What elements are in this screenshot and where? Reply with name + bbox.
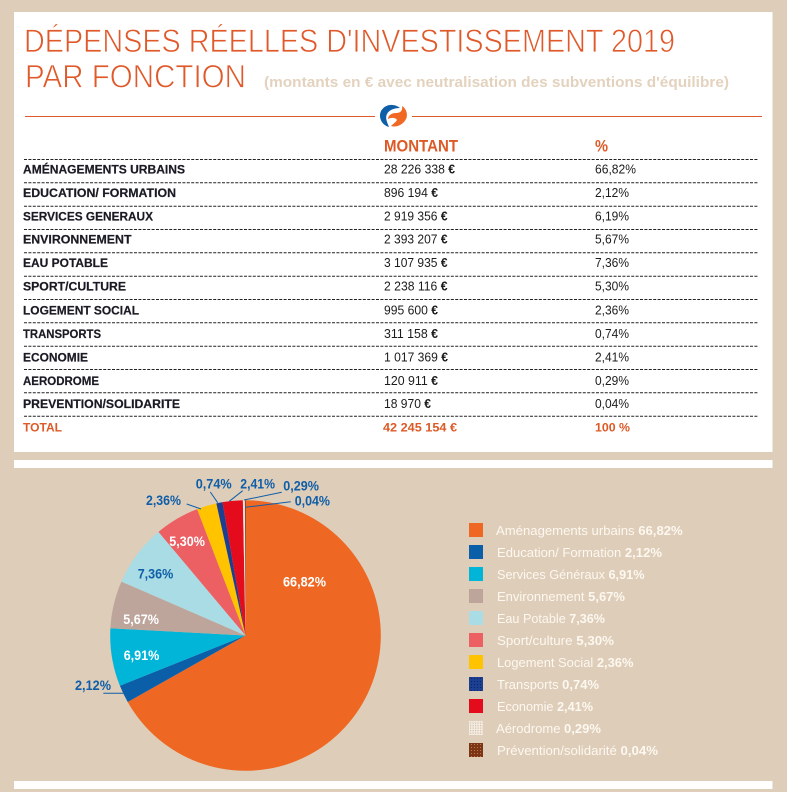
row: services generaux: SERVICES GENERAUX [23, 209, 153, 223]
legend item: education: Education/ Formation 2,12% [497, 545, 662, 560]
pie chart [75, 476, 381, 771]
row: economie: 1 017 369 € [384, 350, 448, 364]
row: aerodrome: AERODROME [23, 374, 99, 388]
row: education: EDUCATION/ FORMATION [23, 186, 176, 200]
row: education [23, 186, 629, 200]
pie leader lines [103, 491, 291, 693]
panel: table [14, 12, 772, 452]
row: prevention/solidarite: PREVENTION/SOLIDARITE [23, 397, 180, 411]
row: services generaux: 2 919 356 € [384, 209, 448, 223]
legend item: logement social: Logement Social 2,36% [497, 655, 634, 670]
legend item: economie: Economie 2,41% [497, 699, 593, 714]
legend item: services généraux: Services Généraux 6,91% [497, 567, 645, 582]
row: services generaux [23, 209, 629, 223]
subtitle: (montants en € avec neutralisation des subventions d'équilibre) [264, 74, 729, 91]
row: transports: 0,74% [595, 327, 629, 341]
row: eau potable: 7,36% [595, 256, 629, 270]
pie labels: 5,67% [123, 612, 159, 627]
legend item: prévention/solidarité: Prévention/solidarité 0,04% [497, 743, 658, 758]
table header: % [595, 138, 608, 156]
row: environnement: ENVIRONNEMENT [23, 233, 132, 247]
row: prevention/solidarite: 18 970 € [384, 397, 431, 411]
row: transports: 311 158 € [384, 327, 438, 341]
row: eau potable [23, 256, 629, 270]
row: eau potable: 3 107 935 € [384, 256, 448, 270]
row: logement social [23, 304, 629, 318]
row: aménagements urbains: 66,82% [595, 162, 636, 176]
row: services generaux: 6,19% [595, 209, 629, 223]
row: economie: 2,41% [595, 350, 629, 364]
row: sport/culture: 2 238 116 € [384, 279, 448, 293]
row: environnement: 2 393 207 € [384, 233, 448, 247]
pie labels: 2,41% [240, 476, 275, 492]
row: aerodrome: 120 911 € [384, 374, 438, 388]
title: PAR FONCTION [25, 58, 246, 94]
pie labels: 2,36% [146, 493, 181, 508]
row: transports [23, 327, 629, 341]
row: environnement [23, 233, 629, 247]
row: economie: ECONOMIE [23, 350, 88, 364]
pie labels: 0,04% [295, 494, 330, 509]
row: education: 2,12% [595, 186, 629, 200]
legend item: eau potable: Eau Potable 7,36% [497, 611, 605, 626]
pie labels [75, 476, 330, 693]
row: total: 100 % [595, 421, 630, 435]
pie labels: 2,12% [75, 678, 111, 693]
table header [384, 138, 608, 156]
row: economie [23, 350, 629, 364]
pie labels: 5,30% [169, 534, 205, 549]
row: total [23, 421, 630, 435]
pie labels: 66,82% [283, 575, 326, 590]
legend item: aménagements urbains: Aménagements urbains 66,82% [496, 523, 683, 538]
row: sport/culture [23, 279, 629, 293]
legend item: sport/culture: Sport/culture 5,30% [497, 633, 614, 648]
row: aménagements urbains: 28 226 338 € [384, 162, 455, 176]
row: eau potable: EAU POTABLE [23, 256, 108, 270]
legend item: transports: Transports 0,74% [497, 677, 599, 692]
legend item: aérodrome: Aérodrome 0,29% [496, 721, 601, 736]
row: aerodrome [23, 374, 629, 388]
pie labels: 6,91% [124, 648, 159, 663]
pie labels: 0,29% [283, 479, 319, 494]
row: logement social: 2,36% [595, 304, 629, 318]
row: logement social: 995 600 € [384, 304, 438, 318]
row: aménagements urbains: AMÉNAGEMENTS URBAINS [23, 162, 185, 176]
pie labels: 0,74% [196, 476, 232, 492]
divider with logo [25, 105, 762, 127]
table header: MONTANT [384, 138, 458, 156]
row: sport/culture: 5,30% [595, 279, 629, 293]
row: aerodrome: 0,29% [595, 374, 629, 388]
row: transports: TRANSPORTS [23, 327, 101, 341]
legend [469, 523, 683, 758]
row: total: TOTAL [23, 421, 62, 435]
icon: logo [380, 105, 407, 127]
row: environnement: 5,67% [595, 233, 629, 247]
row: prevention/solidarite [23, 397, 629, 411]
row: total: 42 245 154 € [383, 421, 457, 435]
title: DÉPENSES RÉELLES D'INVESTISSEMENT 2019 [24, 23, 675, 59]
row: prevention/solidarite: 0,04% [595, 397, 629, 411]
row: aménagements urbains [23, 162, 636, 176]
row: logement social: LOGEMENT SOCIAL [23, 304, 139, 318]
pie labels: 7,36% [138, 566, 173, 581]
legend item: environnement: Environnement 5,67% [497, 589, 625, 604]
row: sport/culture: SPORT/CULTURE [23, 279, 126, 293]
title [24, 23, 675, 94]
row: education: 896 194 € [384, 186, 438, 200]
